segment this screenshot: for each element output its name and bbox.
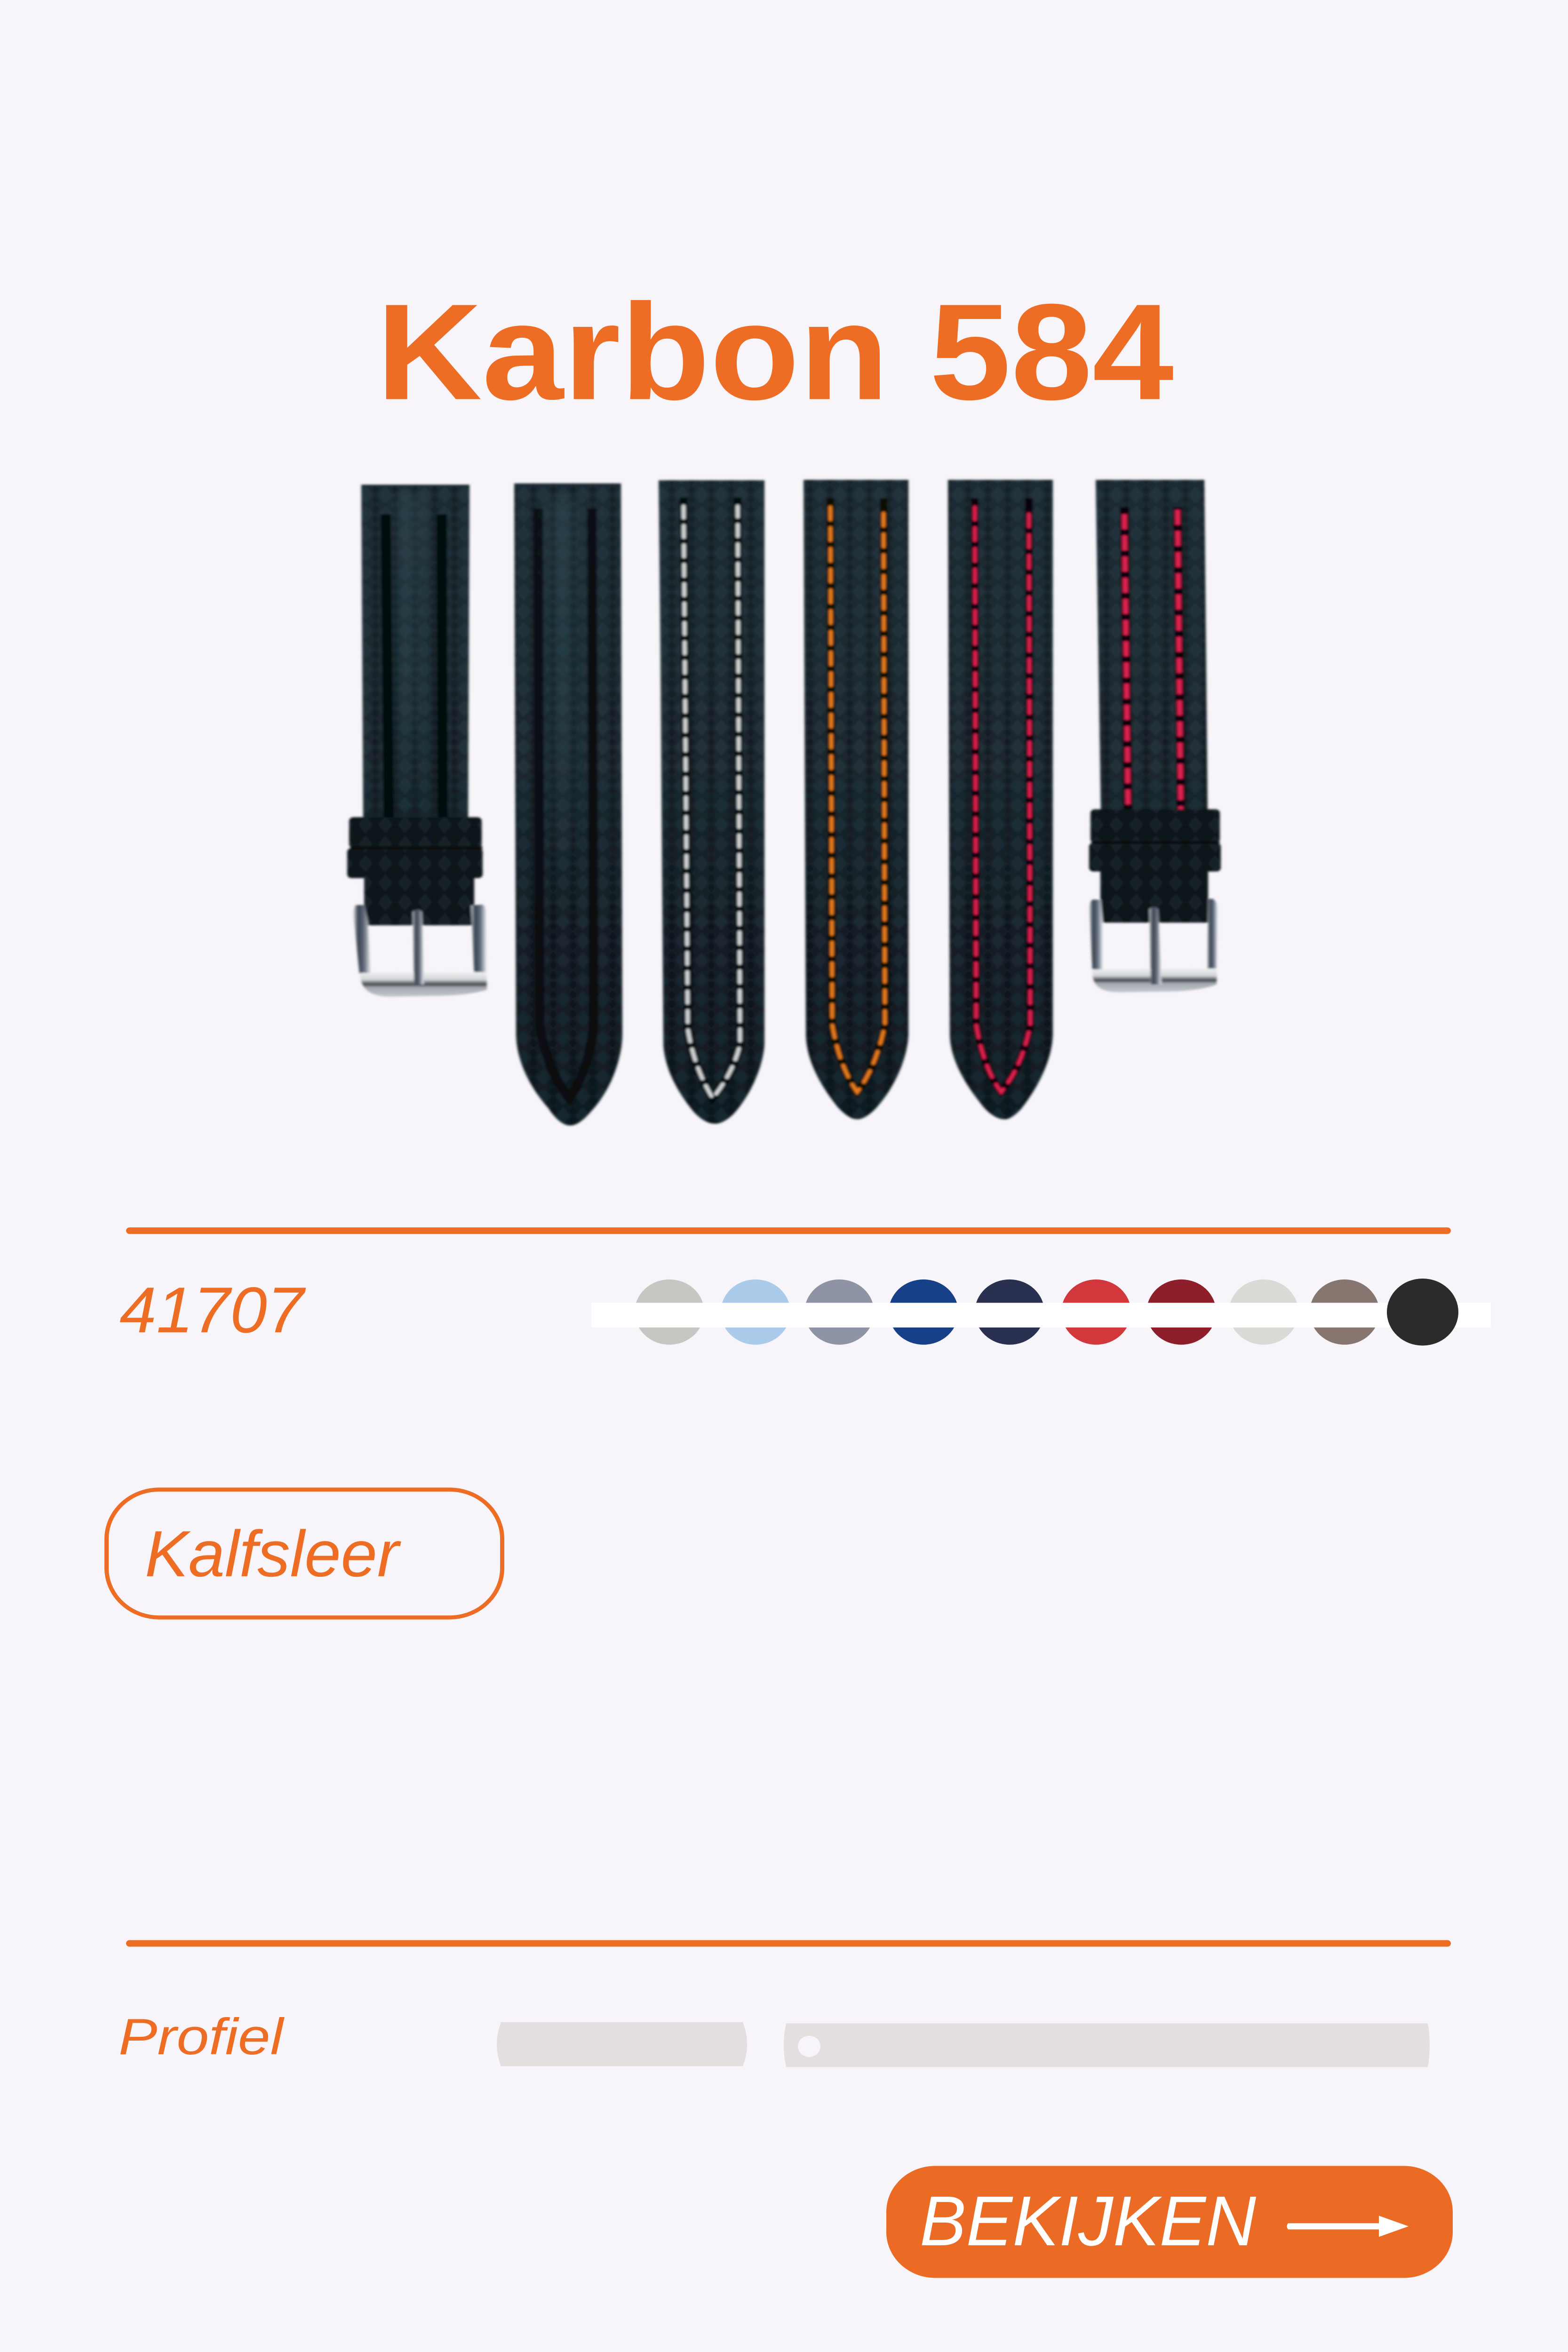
- profile label: Profiel: [119, 2008, 285, 2065]
- swatch: grey blue: [804, 1279, 874, 1345]
- strap 2: long end with black stitching: [514, 484, 622, 1126]
- strap 1: black buckle half with black stitching: [347, 485, 487, 997]
- strap 6: buckle half with red stitching: [1089, 480, 1221, 993]
- swatch: blue: [889, 1279, 958, 1345]
- product photo: six watch straps: [347, 480, 1221, 1126]
- material label: Kalfsleer: [145, 1518, 401, 1590]
- swatch: red: [1061, 1279, 1131, 1345]
- swatch: navy: [975, 1279, 1044, 1345]
- strap hole: [798, 2036, 820, 2057]
- icon: arrow: [1287, 2216, 1409, 2237]
- swatch: black selected: [1387, 1279, 1458, 1345]
- material tag: [106, 1490, 502, 1617]
- swatch: light grey: [635, 1279, 704, 1345]
- profile diagram: short strap: [497, 2022, 747, 2066]
- strap 3: long end with white stitching: [659, 480, 764, 1124]
- colour swatches: [591, 1279, 1491, 1345]
- strap 5: long end with red stitching: [948, 480, 1053, 1120]
- divider top: [126, 1227, 1451, 1234]
- title: Karbon 584: [376, 275, 1175, 428]
- divider bottom: [126, 1940, 1451, 1947]
- button label: BEKIJKEN: [920, 2182, 1257, 2260]
- button: [886, 2166, 1453, 2278]
- swatch: light blue: [721, 1279, 790, 1345]
- profile diagram: long strap: [784, 2024, 1430, 2067]
- white bar across swatches: [591, 1303, 1491, 1327]
- swatch: off white: [1229, 1279, 1298, 1345]
- strap 4: long end with orange stitching: [804, 480, 908, 1120]
- swatch: burgundy: [1146, 1279, 1216, 1345]
- article number: 41707: [119, 1274, 306, 1346]
- swatch: taupe: [1310, 1279, 1379, 1345]
